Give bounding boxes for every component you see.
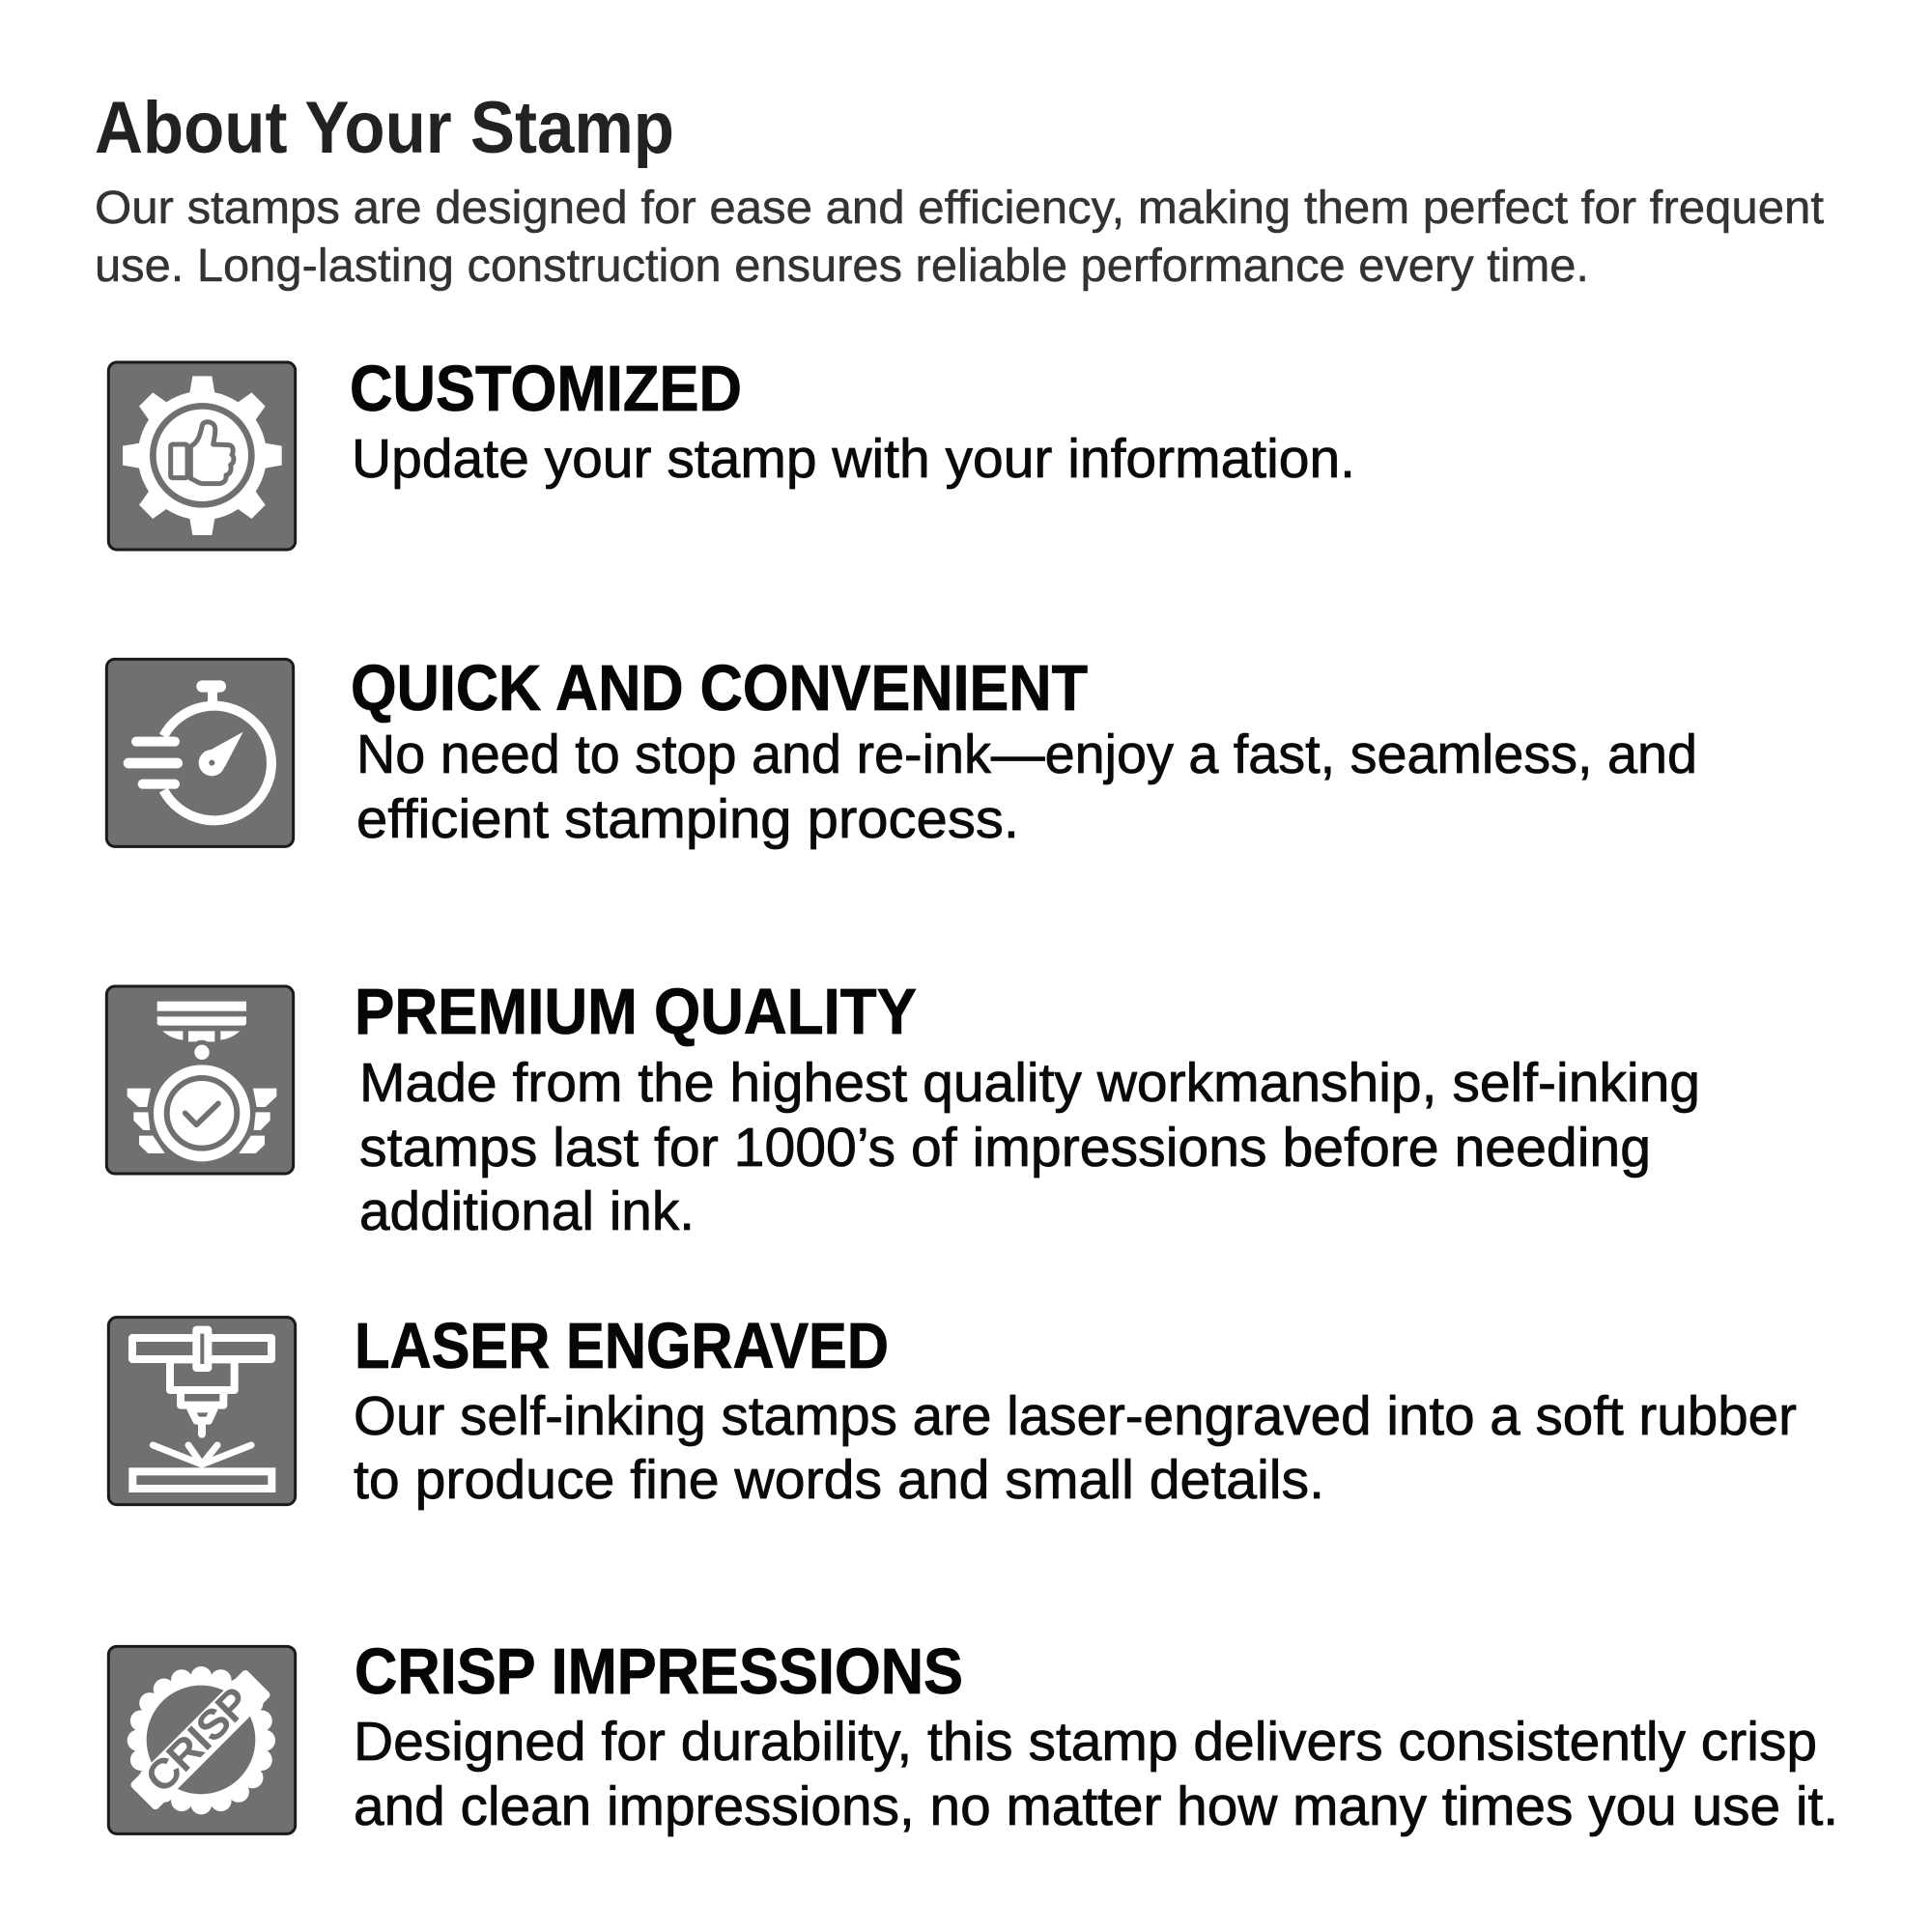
description: to produce fine words and small details. [354,1449,1324,1511]
icon: laser engraver [108,1318,296,1505]
description: No need to stop and re-ink—enjoy a fast, seamless, and [356,724,1697,785]
panel: laser engraved [108,1310,1797,1511]
description: Update your stamp with your information. [352,428,1355,490]
description [354,1385,1797,1511]
description [356,724,1697,850]
heading: LASER ENGRAVED [355,1310,889,1382]
panel: quick and convenient [106,652,1697,850]
description [359,1052,1700,1242]
icon: medal [106,986,294,1174]
heading: PREMIUM QUALITY [355,976,917,1048]
icon: gear with thumbs up [108,362,296,550]
panel: crisp impressions [108,1635,1838,1837]
intro text: Our stamps are designed for ease and efficiency, making them perfect for frequent [95,183,1824,234]
description: Our self-inking stamps are laser-engraved into a soft rubber [354,1385,1797,1447]
description: Designed for durability, this stamp delivers consistently crisp [354,1711,1817,1773]
description: efficient stamping process. [356,788,1019,850]
panel: premium quality [106,976,1700,1242]
intro text: use. Long-lasting construction ensures reliable performance every time. [95,241,1589,292]
description [354,1711,1838,1837]
heading: QUICK AND CONVENIENT [351,652,1088,724]
intro text [95,183,1824,292]
description: Made from the highest quality workmanship, self-inking [359,1052,1700,1114]
icon: crisp seal [108,1646,296,1833]
icon: stopwatch [106,659,294,846]
description: stamps last for 1000’s of impressions before needing [359,1117,1651,1179]
heading: CRISP IMPRESSIONS [355,1635,963,1708]
icon: crisp seal: CRISP [137,1679,259,1801]
description: and clean impressions, no matter how many times you use it. [354,1776,1838,1837]
heading: CUSTOMIZED [350,353,742,425]
panel: customized [108,353,1355,550]
description: additional ink. [359,1180,695,1242]
title: About Your Stamp [95,87,674,169]
